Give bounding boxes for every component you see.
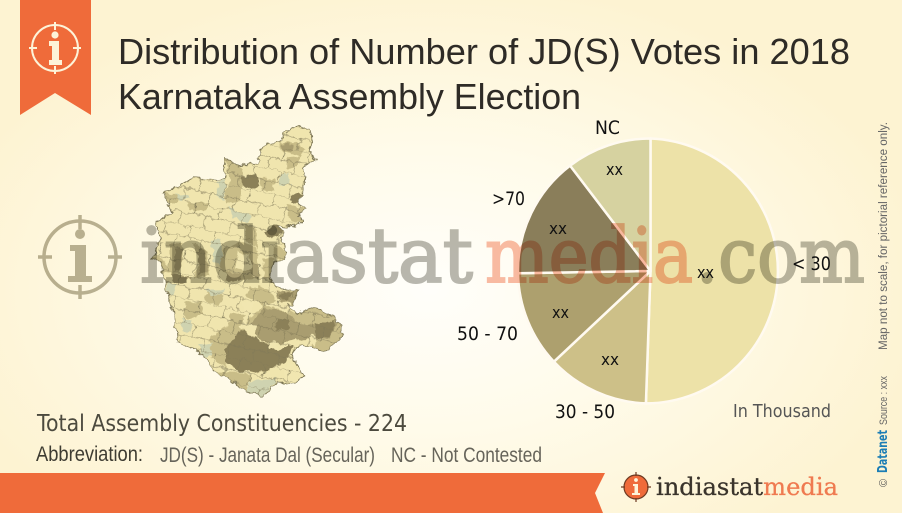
footer bar xyxy=(0,473,605,513)
abbreviations: JD(S) - Janata Dal (Secular) xyxy=(160,444,375,467)
unit note: In Thousand xyxy=(733,402,831,422)
side credits xyxy=(876,122,891,487)
title: Distribution of Number of JD(S) Votes in 2018 xyxy=(118,31,850,72)
side credits: Source : xxx xyxy=(878,376,890,425)
watermark text: .com xyxy=(696,211,865,300)
pie category labels: NC xyxy=(595,118,620,139)
watermark icon xyxy=(38,215,122,299)
logo text: indiastatmedia xyxy=(656,473,838,501)
slice: above 70 xyxy=(518,166,650,273)
slice: 50 to 70 xyxy=(518,271,650,362)
pie category labels xyxy=(457,118,831,423)
watermark: indiastatmedia.com xyxy=(38,211,865,300)
pie category labels: 50 - 70 xyxy=(457,324,518,345)
footer logo xyxy=(621,472,838,502)
map: Karnataka constituencies xyxy=(150,125,344,398)
title: Karnataka Assembly Election xyxy=(118,76,581,117)
pie value labels: xx xyxy=(606,160,623,179)
logo icon xyxy=(621,472,651,502)
pie category labels: < 30 xyxy=(792,254,831,275)
side credits: Datanet xyxy=(876,430,891,473)
title xyxy=(118,31,850,117)
pie value labels: xx xyxy=(601,350,619,369)
watermark text xyxy=(140,211,865,300)
ribbon badge xyxy=(20,0,91,115)
watermark text: media xyxy=(485,211,693,300)
side credits: Map not to scale, for pictorial reference only. xyxy=(878,122,890,350)
abbreviations: Abbreviation: xyxy=(36,443,143,466)
slice: NC xyxy=(570,138,650,271)
pie value labels: xx xyxy=(552,303,569,322)
abbreviations xyxy=(36,443,542,467)
pie chart: vote distribution xyxy=(518,138,778,403)
slice: 30 to 50 xyxy=(554,271,650,403)
pie value labels: xx xyxy=(697,263,714,282)
side credits: © xyxy=(878,479,890,487)
slice: less than 30 xyxy=(646,138,778,403)
pie value labels: xx xyxy=(549,219,567,238)
pie value labels xyxy=(549,160,714,369)
watermark text: indiastat xyxy=(140,211,473,300)
total constituencies: Total Assembly Constituencies - 224 xyxy=(36,411,407,437)
pie category labels: >70 xyxy=(492,189,525,210)
abbreviations: NC - Not Contested xyxy=(391,444,542,467)
icon: info target xyxy=(29,22,81,74)
pie category labels: 30 - 50 xyxy=(555,402,615,423)
